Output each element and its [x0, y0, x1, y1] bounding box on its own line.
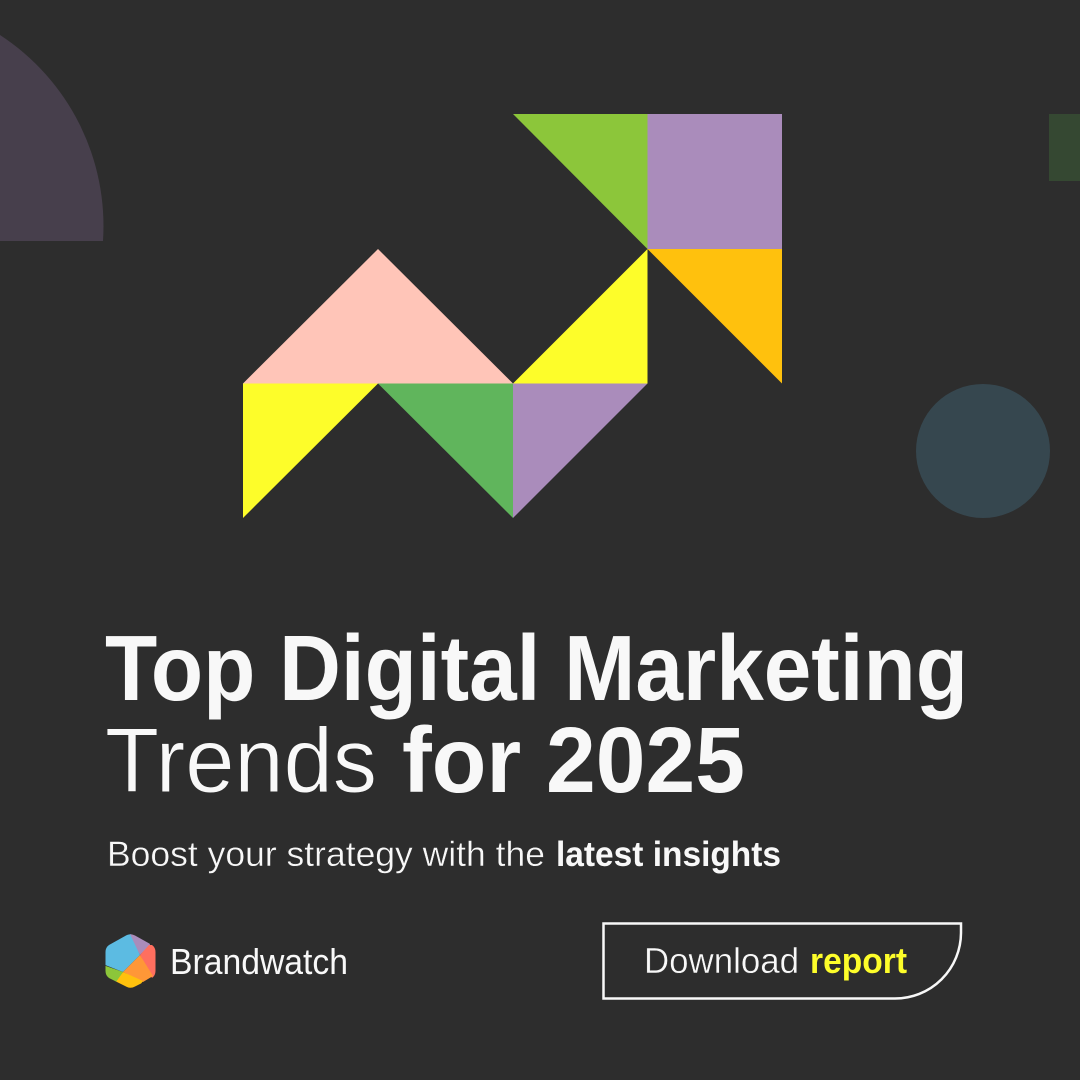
- title: [105, 616, 968, 812]
- icon: upward arrow built from geometric shapes: [243, 114, 782, 518]
- lower purple triangle: [513, 384, 648, 518]
- button: download report: [604, 924, 961, 998]
- wordmark: Brandwatch: [170, 941, 348, 982]
- title line 2: Trends: [105, 710, 377, 812]
- lower green triangle: [378, 384, 513, 518]
- arrow purple square: [648, 114, 782, 249]
- icon: multicolour hexagon: [106, 934, 156, 988]
- title line 1: Top Digital Marketing: [105, 616, 968, 720]
- lower yellow triangle: [243, 384, 378, 518]
- arrow yellow triangle: [513, 249, 648, 384]
- arrow green triangle: [513, 114, 648, 249]
- decorative shape: blue circle: [916, 384, 1050, 518]
- button label: Download: [644, 940, 799, 981]
- arrow orange triangle: [648, 249, 782, 384]
- subtitle: latest insights: [556, 835, 781, 874]
- pink triangle: [243, 249, 513, 384]
- button label: [644, 940, 907, 981]
- title line 2: [105, 708, 745, 812]
- decorative shape: green rectangle: [1049, 114, 1080, 181]
- title line 2: for 2025: [402, 708, 745, 812]
- subtitle: Boost your strategy with the: [107, 835, 545, 874]
- subtitle: [107, 835, 781, 874]
- decorative shape: purple quarter circle: [0, 35, 103, 241]
- Brandwatch logo: [106, 934, 346, 988]
- button outline: [604, 924, 961, 998]
- button label: report: [810, 940, 907, 981]
